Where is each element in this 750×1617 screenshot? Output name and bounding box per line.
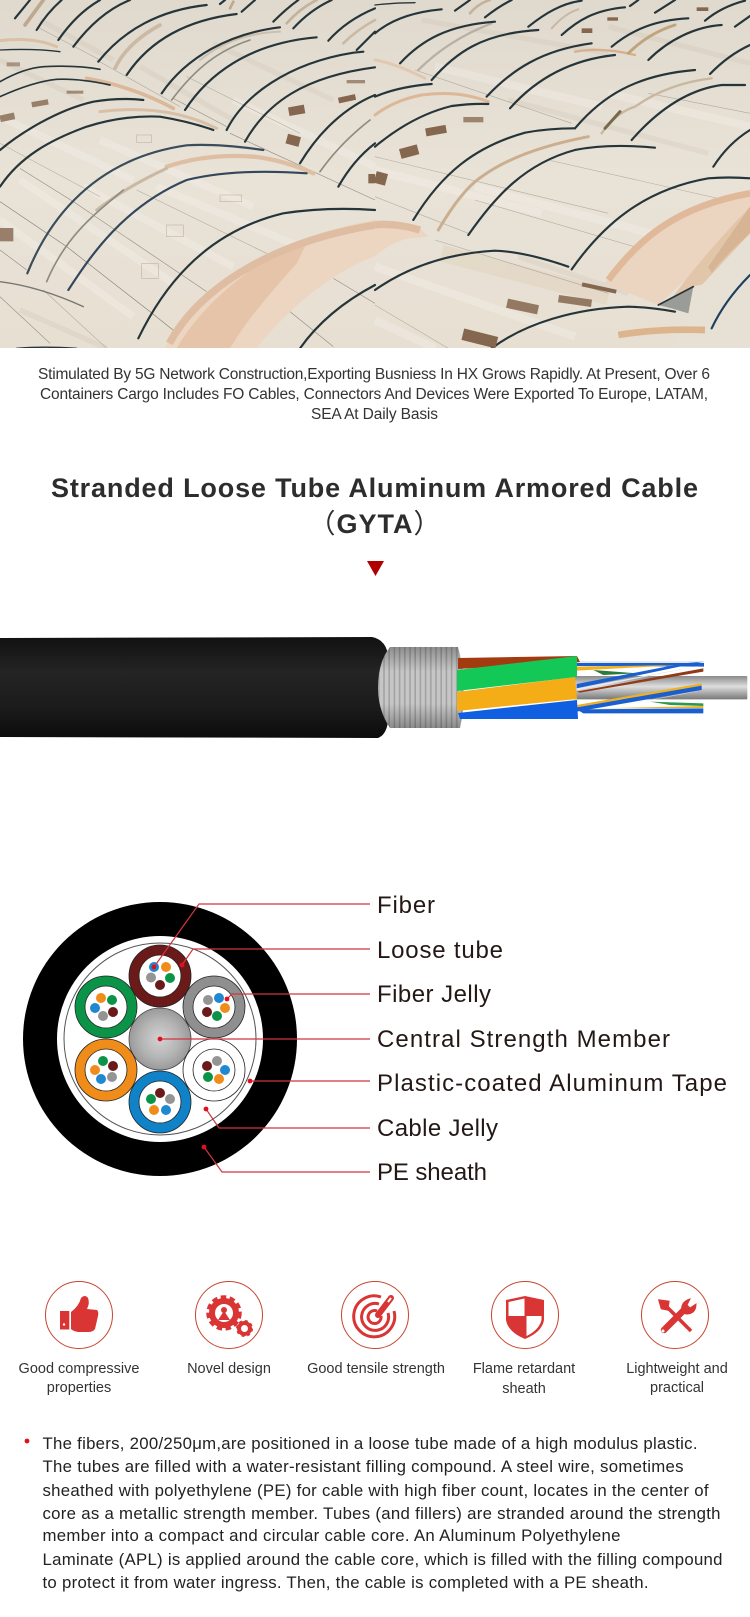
label: Novel design xyxy=(187,1361,271,1377)
icon: wrench and screwdriver xyxy=(642,1282,708,1348)
leader lines and dots xyxy=(152,904,370,1172)
aluminum tape ring xyxy=(64,943,256,1135)
tube: brown xyxy=(129,945,191,1007)
description paragraph: sheathed with polyethylene (PE) for cable with high fiber count, locates in the center of xyxy=(42,1481,709,1500)
arrow: red down triangle xyxy=(367,561,384,576)
icon: target and pencil xyxy=(342,1282,408,1348)
right half of photo xyxy=(374,0,750,348)
feature: flame retardant sheath xyxy=(473,1282,575,1397)
tube: orange xyxy=(75,1039,137,1101)
diagram labels: Loose tube xyxy=(377,937,503,964)
label: properties xyxy=(47,1380,111,1396)
label: Good compressive xyxy=(19,1361,139,1377)
tube: green xyxy=(75,976,137,1038)
cross-section diagram xyxy=(23,902,370,1176)
intro text xyxy=(38,366,710,423)
cable illustration xyxy=(0,637,747,738)
cable outer jacket xyxy=(0,637,388,738)
icon: shield xyxy=(492,1282,558,1348)
description paragraph xyxy=(42,1434,722,1592)
diagram labels: Plastic-coated Aluminum Tape xyxy=(377,1070,727,1097)
icon: thumbs up xyxy=(46,1282,112,1348)
title: （GYTA） xyxy=(308,509,442,539)
description paragraph: to protect it from water ingress. Then, the cable is completed with a PE sheath. xyxy=(42,1573,648,1592)
outer PE sheath xyxy=(23,902,297,1176)
central strength rod and fibers xyxy=(573,662,747,713)
tube: gray xyxy=(183,976,245,1038)
title: Stranded Loose Tube Aluminum Armored Cable xyxy=(51,473,698,503)
title xyxy=(51,473,698,539)
diagram labels: Cable Jelly xyxy=(377,1115,498,1142)
description paragraph: The tubes are filled with a water-resistant filling compound. A steel wire, sometimes xyxy=(42,1457,684,1476)
feature: good compressive properties xyxy=(19,1282,139,1396)
tube: white xyxy=(183,1039,245,1101)
label: Flame retardant xyxy=(473,1361,575,1377)
intro text: Stimulated By 5G Network Construction,Exporting Busniess In HX Grows Rapidly. At Present, Over 6 xyxy=(38,366,710,383)
label: Good tensile strength xyxy=(307,1361,445,1377)
colored loose tubes xyxy=(457,656,580,719)
label: sheath xyxy=(502,1381,546,1397)
intro text: SEA At Daily Basis xyxy=(311,406,438,423)
description paragraph: Laminate (APL) is applied around the cable core, which is filled with the filling compound xyxy=(42,1550,722,1569)
central strength member xyxy=(129,1008,191,1070)
description paragraph: member into a compact and circular cable core. An Aluminum Polyethylene xyxy=(42,1526,620,1545)
photo: stacked wooden cable drums xyxy=(0,0,750,350)
diagram labels: PE sheath xyxy=(377,1159,487,1186)
icon: gears xyxy=(196,1282,262,1348)
intro text: Containers Cargo Includes FO Cables, Connectors And Devices Were Exported To Europe, LATAM, xyxy=(40,386,708,403)
description paragraph: core as a metallic strength member. Tubes (and fillers) are stranded around the strength xyxy=(42,1504,720,1523)
tube: blue xyxy=(129,1071,191,1133)
label: practical xyxy=(650,1380,704,1396)
aluminum armor xyxy=(378,647,464,728)
feature: good tensile strength xyxy=(307,1282,445,1377)
feature: novel design xyxy=(187,1282,271,1377)
diagram labels: Fiber xyxy=(377,892,435,919)
label: Lightweight and xyxy=(626,1361,728,1377)
diagram labels xyxy=(377,892,727,1186)
bullet dot xyxy=(25,1439,29,1443)
feature: lightweight and practical xyxy=(626,1282,728,1396)
cable jelly area xyxy=(57,936,263,1142)
left half of photo xyxy=(0,0,375,348)
diagram labels: Fiber Jelly xyxy=(377,981,491,1008)
description paragraph: The fibers, 200/250μm,are positioned in a loose tube made of a high modulus plastic. xyxy=(42,1434,698,1453)
diagram labels: Central Strength Member xyxy=(377,1026,670,1053)
